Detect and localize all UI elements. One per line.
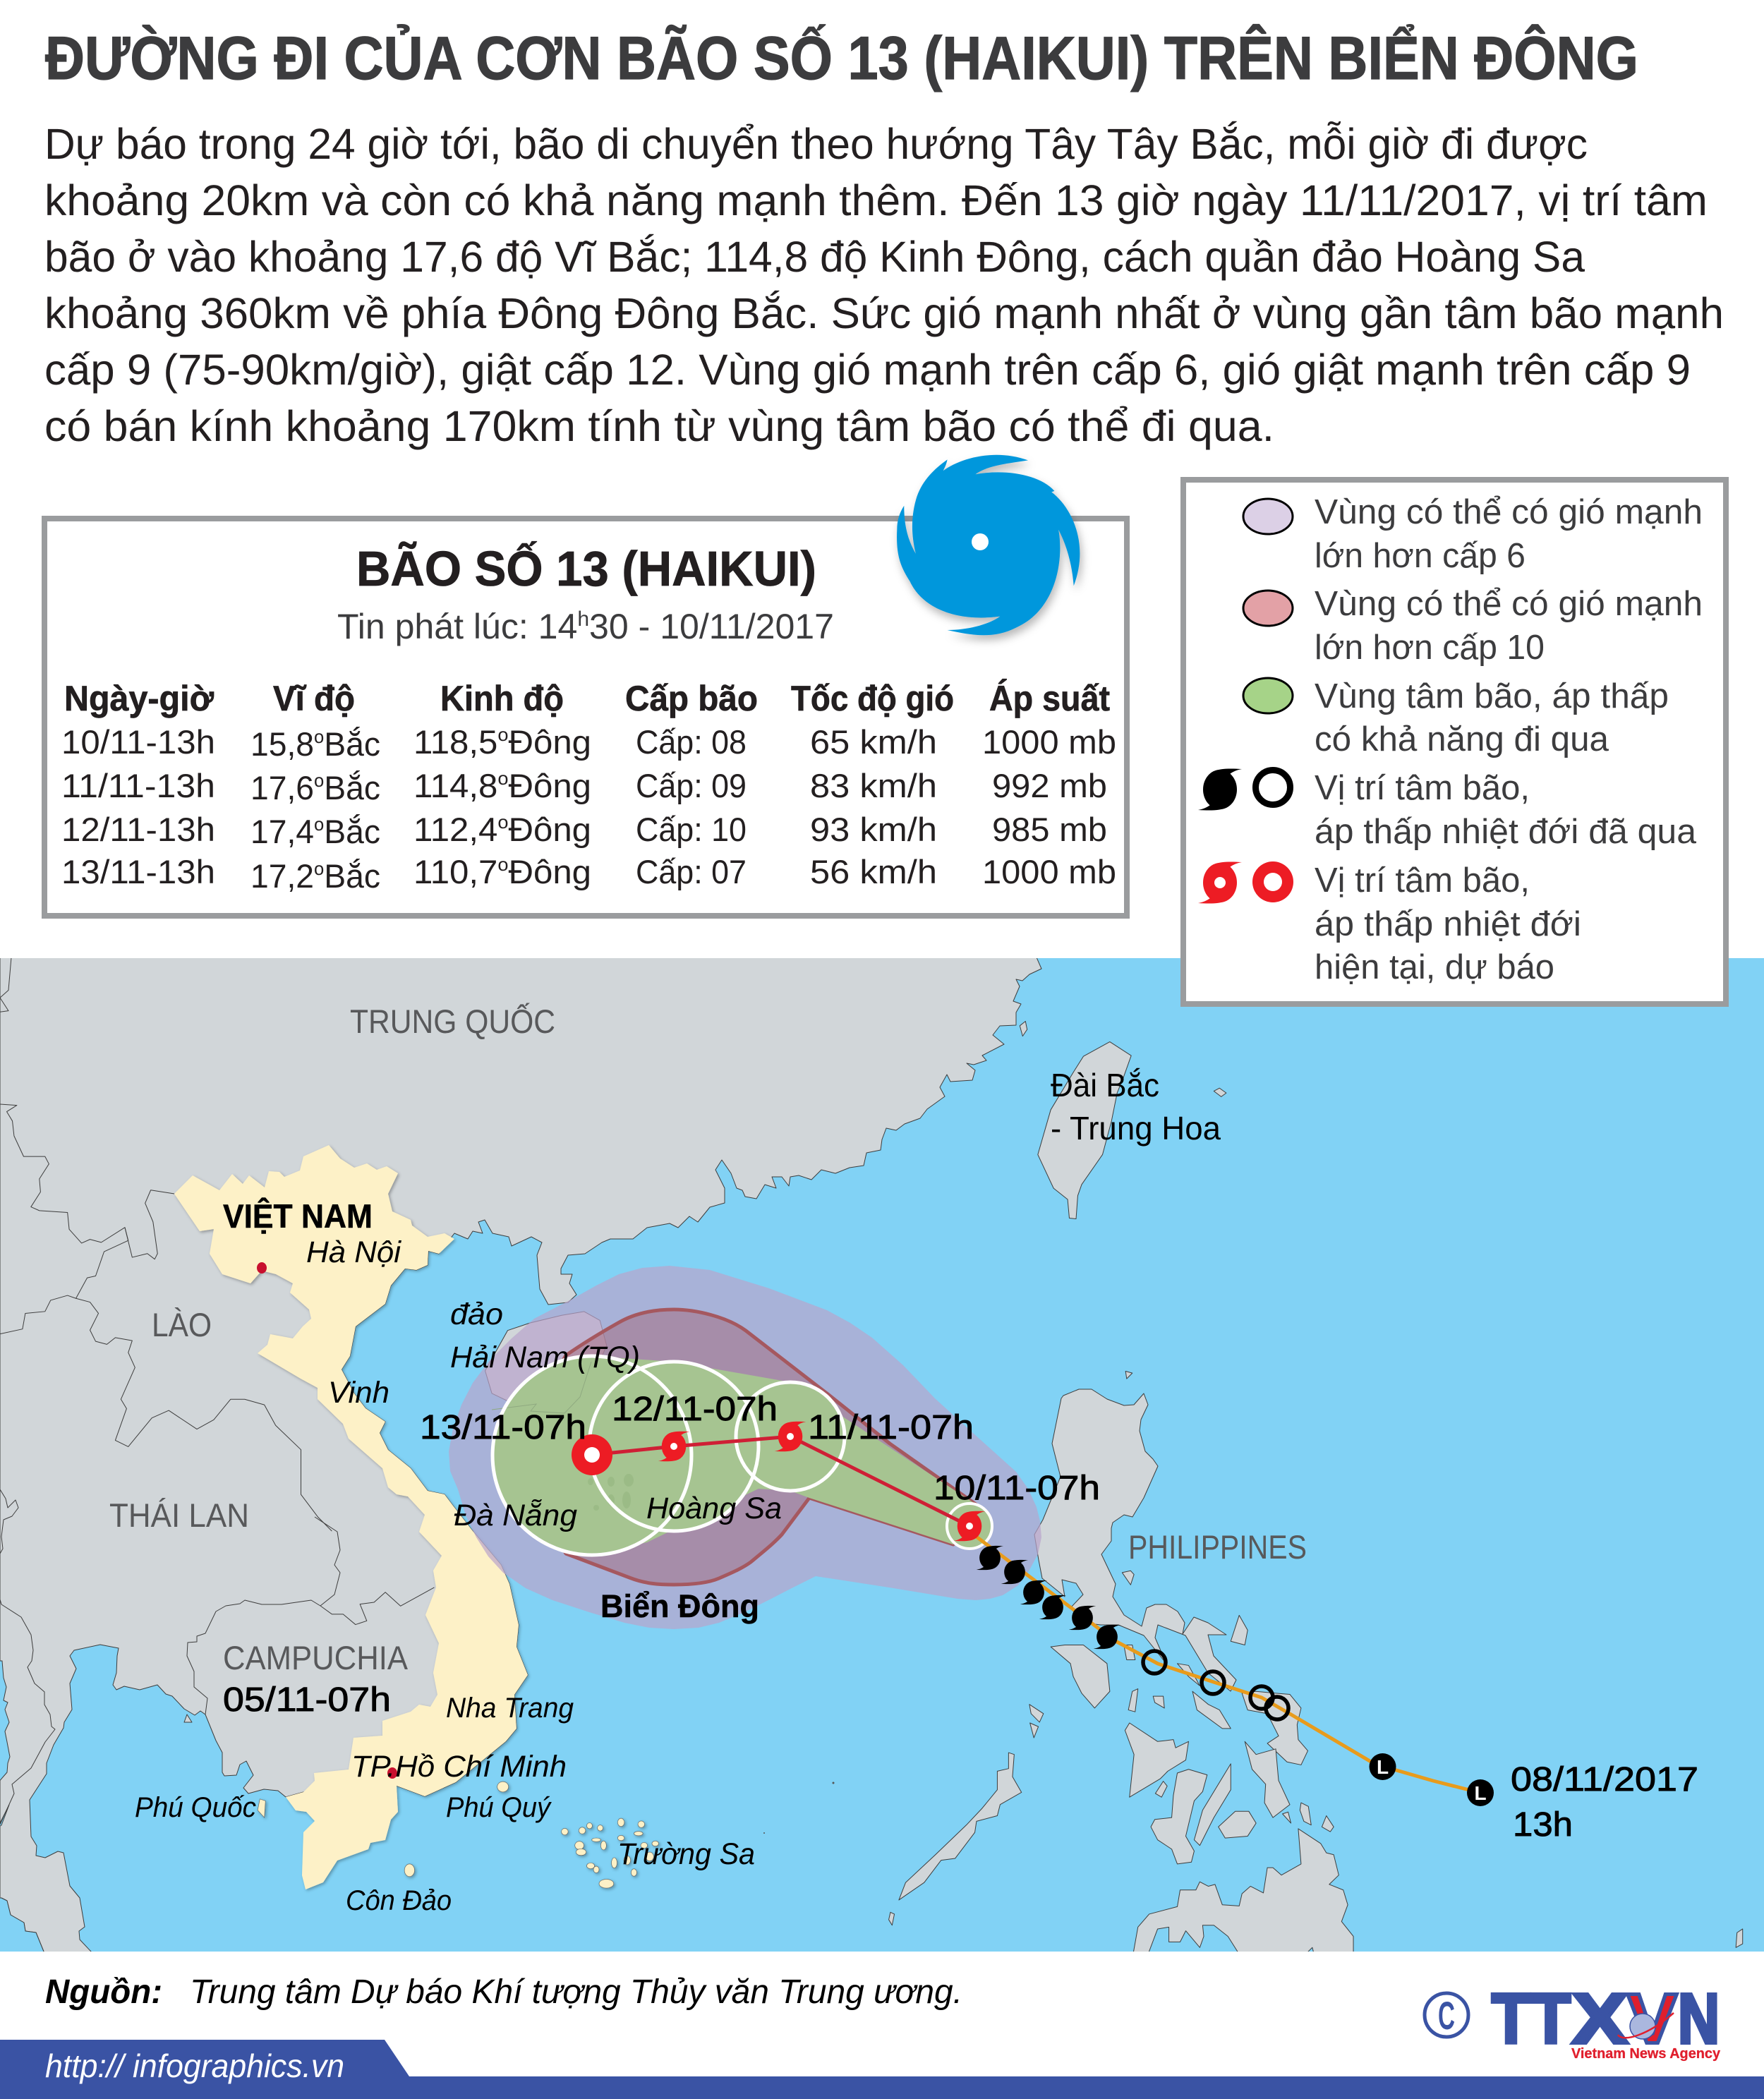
- table rows: 118,5: [413, 723, 494, 761]
- table rows: o: [314, 813, 324, 835]
- agency letters: [1492, 1980, 1720, 2059]
- table header row: [64, 679, 1110, 718]
- table rows: 1000 mb: [982, 853, 1116, 890]
- map labels: dates: 10/11-07h: [934, 1470, 1100, 1507]
- copyright mark: [1425, 1993, 1468, 2038]
- map labels: dates: 13/11-07h: [420, 1409, 586, 1446]
- map labels: places: đảo: [450, 1297, 503, 1331]
- intro text block: có bán kính khoảng 170km tính từ vùng tâm bão có thể đi qua.: [44, 402, 1274, 450]
- city dots: [257, 1262, 397, 1779]
- table rows: o: [314, 858, 324, 879]
- map labels: countries: LÀO: [152, 1306, 212, 1343]
- map labels: countries: CAMPUCHIA: [223, 1639, 409, 1676]
- west sea sliver: [0, 1805, 9, 1827]
- table rows: Cấp: 07: [636, 853, 747, 890]
- past track line: [969, 1526, 1480, 1793]
- table rows: 17,2: [250, 857, 315, 895]
- map labels: small places: Nha Trang: [446, 1693, 574, 1724]
- copyright mark: C: [1438, 1993, 1455, 2038]
- legend: red zone: lớn hơn cấp 10: [1315, 629, 1545, 667]
- map labels: places: Hoàng Sa: [646, 1492, 782, 1525]
- map labels: small places: Côn Đảo: [346, 1885, 452, 1916]
- table rows: Bắc: [324, 813, 380, 850]
- map labels: places: Hải Nam (TQ): [450, 1341, 640, 1374]
- legend: current and forecast positions: áp thấp nhiệt đới: [1315, 905, 1581, 943]
- intro text block: khoảng 20km và còn có khả năng mạnh thêm. Đến 13 giờ ngày 11/11/2017, vị trí tâm: [44, 176, 1708, 224]
- intro text block: khoảng 360km về phía Đông Đông Bắc. Sức gió mạnh nhất ở vùng gần tâm bão mạnh: [44, 289, 1724, 337]
- source line: Trung tâm Dự báo Khí tượng Thủy văn Trung ương.: [190, 1973, 962, 2011]
- table rows: Cấp: 10: [636, 811, 747, 848]
- map labels: countries: TRUNG QUỐC: [350, 1003, 555, 1040]
- icons: low pressure start: L: [1377, 1756, 1389, 1778]
- table rows: 992 mb: [992, 767, 1107, 804]
- agency letters: T: [1531, 1980, 1571, 2059]
- map labels: dates: 05/11-07h: [223, 1681, 391, 1719]
- west sea strip: [0, 1661, 10, 1783]
- map labels: countries: [109, 1003, 1307, 1676]
- table rows: 985 mb: [992, 811, 1107, 848]
- legend: purple zone: [1243, 493, 1703, 575]
- map labels: places: Hà Nội: [306, 1235, 401, 1269]
- legend: purple zone: Vùng có thể có gió mạnh: [1315, 493, 1703, 531]
- map labels: places: Đà Nẵng: [454, 1499, 577, 1532]
- table rows: [61, 723, 1116, 895]
- legend panel: [1183, 480, 1726, 1004]
- hoang sa islands: [588, 1474, 634, 1511]
- table rows: o: [497, 768, 508, 789]
- table rows: Đông: [508, 723, 591, 761]
- icon: forecast swirl 12/11: [658, 1432, 689, 1461]
- agency letters: N: [1678, 1980, 1720, 2059]
- hainan island: [485, 1312, 607, 1411]
- icon: forecast centre 13/11: [572, 1434, 612, 1475]
- table rows: o: [497, 854, 508, 875]
- table header row: Vĩ độ: [273, 679, 355, 718]
- table subheading: h: [577, 607, 589, 631]
- table rows: 112,4: [413, 811, 494, 848]
- map label: Viet Nam: VIỆT NAM: [223, 1197, 373, 1235]
- luzon: [1034, 1389, 1236, 1691]
- table rows: o: [497, 724, 508, 745]
- table rows: Bắc: [324, 857, 380, 895]
- map labels: places: Vinh: [328, 1376, 389, 1410]
- table rows: Đông: [508, 853, 591, 890]
- agency tagline: Vietnam News Agency: [1571, 2046, 1721, 2062]
- table rows: 10/11-13h: [61, 723, 215, 761]
- land masses: [0, 945, 1743, 1961]
- map labels: dates: 08/11/2017: [1511, 1761, 1698, 1798]
- map label: Taipei: [1051, 1067, 1221, 1147]
- country borders: [0, 957, 434, 1825]
- legend: purple zone: lớn hơn cấp 6: [1315, 537, 1526, 575]
- table rows: Cấp: 08: [636, 723, 747, 761]
- agency letters: V: [1627, 1980, 1677, 2059]
- table rows: 13/11-13h: [61, 853, 215, 890]
- table heading: BÃO SỐ 13 (HAIKUI): [356, 540, 816, 596]
- map labels: small places: Phú Quốc: [135, 1792, 256, 1823]
- table header row: Áp suất: [989, 679, 1110, 718]
- legend: current and forecast positions: [1198, 861, 1581, 986]
- table header row: Kinh độ: [440, 679, 564, 718]
- table rows: 12/11-13h: [61, 811, 215, 848]
- legend: current and forecast positions: Vị trí tâm bão,: [1315, 861, 1530, 900]
- table rows: 65 km/h: [810, 723, 937, 761]
- legend: red zone: Vùng có thể có gió mạnh: [1315, 585, 1703, 623]
- map label: Taipei: - Trung Hoa: [1051, 1110, 1221, 1147]
- source line: Nguồn:: [45, 1973, 162, 2011]
- legend: green zone: Vùng tâm bão, áp thấp: [1315, 677, 1669, 715]
- map labels: places: Trường Sa: [617, 1837, 755, 1871]
- table header row: Tốc độ gió: [791, 679, 954, 718]
- map labels: small places: Phú Quý: [446, 1792, 552, 1823]
- table rows: Bắc: [324, 725, 380, 763]
- intro text block: cấp 9 (75-90km/giờ), giật cấp 12. Vùng gió mạnh trên cấp 6, gió giật mạnh trên cấp 9: [44, 346, 1691, 394]
- legend: past positions: áp thấp nhiệt đới đã qua: [1315, 813, 1697, 851]
- table rows: 56 km/h: [810, 853, 937, 890]
- zone: wind stronger than level 6: [449, 1266, 1041, 1629]
- map labels: dates: 13h: [1513, 1806, 1573, 1844]
- table rows: Cấp: 09: [636, 767, 747, 804]
- intro text block: Dự báo trong 24 giờ tới, bão di chuyển theo hướng Tây Tây Bắc, mỗi giờ đi được: [44, 120, 1588, 168]
- icons: past depression positions: [1143, 1651, 1288, 1719]
- table rows: 114,8: [413, 767, 494, 804]
- vietnamese islands: [258, 1782, 659, 1888]
- table header row: Ngày-giờ: [64, 679, 214, 718]
- table rows: 93 km/h: [810, 811, 937, 848]
- table rows: o: [314, 726, 324, 747]
- legend: green zone: có khả năng đi qua: [1315, 720, 1609, 758]
- table rows: Đông: [508, 767, 591, 804]
- logo: TTXVN: [1425, 1980, 1721, 2062]
- map labels: dates: [223, 1391, 1698, 1844]
- map labels: dates: 12/11-07h: [612, 1391, 778, 1428]
- agency letters: X: [1572, 1980, 1628, 2059]
- icons: low pressure start: [1369, 1753, 1494, 1806]
- zone: storm centre path: [492, 1356, 992, 1555]
- small gulf island: [184, 1714, 192, 1722]
- map labels: countries: PHILIPPINES: [1128, 1528, 1307, 1566]
- table header row: Cấp bão: [625, 679, 758, 718]
- table rows: 83 km/h: [810, 767, 937, 804]
- philippine islands: [889, 1571, 1743, 1959]
- map label: East Sea: Biển Đông: [600, 1588, 759, 1624]
- table rows: 11/11-13h: [61, 767, 215, 804]
- mainland asia: [0, 945, 1041, 1961]
- icons: past storm positions: [977, 1546, 1120, 1649]
- storm info table panel: [44, 519, 1127, 916]
- map panel: [0, 945, 1764, 1961]
- sw sea corner: [0, 1898, 45, 1961]
- map labels: dates: 11/11-07h: [808, 1409, 974, 1446]
- icon: cyclone: [897, 455, 1080, 635]
- table subheading: 30 - 10/11/2017: [589, 607, 834, 646]
- table rows: Bắc: [324, 769, 380, 806]
- legend: past positions: [1198, 768, 1697, 851]
- intro text block: bão ở vào khoảng 17,6 độ Vĩ Bắc; 114,8 độ Kinh Đông, cách quần đảo Hoàng Sa: [44, 233, 1585, 281]
- tiny reef dots: [763, 1782, 834, 1834]
- legend: red zone: [1243, 585, 1703, 667]
- table rows: o: [314, 770, 324, 791]
- table rows: 17,6: [250, 769, 315, 806]
- map labels: small places: [135, 1693, 574, 1916]
- table rows: 110,7: [413, 853, 494, 890]
- table rows: o: [497, 811, 508, 833]
- sea background: [0, 958, 1764, 1952]
- vietnam: [174, 1145, 659, 1889]
- website url: http:// infographics.vn: [45, 2047, 344, 2084]
- intro text block: [44, 120, 1724, 450]
- forecast track line: [592, 1436, 969, 1526]
- hainan outline on zone: [492, 1362, 591, 1413]
- map label: Taipei: Đài Bắc: [1051, 1067, 1159, 1103]
- taiwan: [1020, 1021, 1226, 1379]
- legend: green zone: [1243, 677, 1669, 758]
- footer bar: [0, 2040, 1764, 2099]
- legend: current and forecast positions: hiện tại, dự báo: [1315, 948, 1554, 986]
- table subheading: Tin phát lúc: 14: [337, 607, 577, 646]
- agency letters: T: [1492, 1980, 1530, 2059]
- map labels: countries: THÁI LAN: [109, 1496, 249, 1534]
- icon: current swirl 10/11: [954, 1511, 985, 1541]
- title: ĐƯỜNG ĐI CỦA CƠN BÃO SỐ 13 (HAIKUI) TRÊN BIỂN ĐÔNG: [45, 25, 1638, 92]
- zone: wind stronger than level 10: [508, 1309, 976, 1585]
- icons: low pressure start: L: [1474, 1782, 1487, 1804]
- map labels: places: TP.Hồ Chí Minh: [351, 1750, 567, 1784]
- table rows: 1000 mb: [982, 723, 1116, 761]
- globe: [1618, 2013, 1674, 2039]
- map labels: places: [306, 1235, 782, 1871]
- legend: past positions: Vị trí tâm bão,: [1315, 769, 1530, 807]
- icon: forecast swirl 11/11: [775, 1422, 806, 1451]
- table rows: 15,8: [250, 725, 315, 763]
- table rows: Đông: [508, 811, 591, 848]
- table rows: 17,4: [250, 813, 315, 850]
